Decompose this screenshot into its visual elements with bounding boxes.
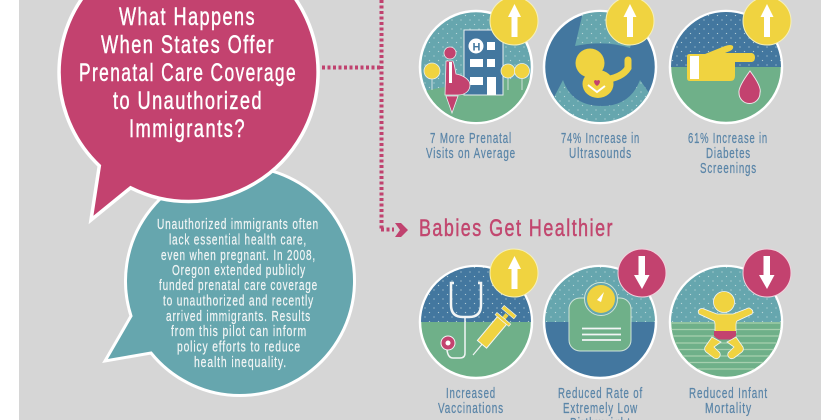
badge: up arrow bbox=[606, 0, 654, 45]
labels: bottom row: Mortality bbox=[705, 400, 752, 417]
labels: bottom row: Vaccinations bbox=[438, 400, 504, 417]
labels: bottom row: Reduced Rate of bbox=[558, 385, 643, 402]
labels: top row bbox=[426, 130, 768, 177]
body text bbox=[157, 217, 319, 371]
syringe bbox=[472, 305, 517, 356]
icon: infant mortality bbox=[665, 265, 787, 378]
body text: from this pilot can inform bbox=[171, 324, 307, 340]
labels: top row: Visits on Average bbox=[426, 145, 516, 162]
connector: dotted lines and arrow bbox=[322, 0, 408, 237]
heading: babies get healthier: Babies Get Healthier bbox=[419, 215, 614, 242]
icon: birthweight scale bbox=[540, 265, 662, 378]
body text: even when pregnant. In 2008, bbox=[161, 248, 316, 264]
body text: lack essential health care, bbox=[169, 232, 307, 248]
badge: down arrow bbox=[618, 249, 666, 297]
pregnant woman bbox=[444, 47, 470, 113]
title: When States Offer bbox=[101, 31, 275, 59]
labels: bottom row: Increased bbox=[446, 385, 496, 402]
pink speech bubble bbox=[59, 0, 318, 220]
labels: top row: 74% Increase in bbox=[561, 130, 640, 147]
labels: top row: Screenings bbox=[700, 160, 757, 177]
badge: up arrow bbox=[743, 0, 791, 45]
body text: Unauthorized immigrants often bbox=[157, 217, 319, 233]
fetus bbox=[576, 48, 628, 98]
trees bbox=[424, 63, 530, 90]
badge: up arrow bbox=[490, 249, 538, 297]
labels: top row: Diabetes bbox=[706, 145, 751, 162]
title: Prenatal Care Coverage bbox=[79, 59, 297, 87]
labels: bottom row: Reduced Infant bbox=[689, 385, 768, 402]
labels: top row: Ultrasounds bbox=[569, 145, 632, 162]
body text: funded prenatal care coverage bbox=[159, 278, 318, 294]
icon: ultrasound bbox=[544, 11, 656, 125]
title: What Happens bbox=[119, 3, 256, 31]
body text: Oregon extended publicly bbox=[172, 263, 306, 279]
body text: policy efforts to reduce bbox=[177, 340, 301, 356]
baby bbox=[698, 292, 753, 359]
body text: to unauthorized and recently bbox=[163, 294, 314, 310]
badge: down arrow bbox=[743, 249, 791, 297]
teal speech bubble bbox=[105, 166, 355, 395]
badge: up arrow bbox=[490, 0, 538, 45]
icon: diabetes screening bbox=[665, 10, 787, 123]
body text: health inequality. bbox=[194, 355, 287, 371]
icon: prenatal visits bbox=[418, 10, 534, 125]
labels: top row: 7 More Prenatal bbox=[430, 130, 512, 147]
body text: arrived immigrants. Results bbox=[166, 309, 311, 325]
icon: vaccinations bbox=[415, 265, 537, 378]
title: Immigrants? bbox=[129, 115, 246, 143]
hospital: H bbox=[472, 42, 480, 54]
stethoscope bbox=[447, 283, 481, 358]
title: to Unauthorized bbox=[113, 87, 263, 115]
pointing hand bbox=[687, 45, 755, 81]
labels: bottom row bbox=[438, 385, 768, 420]
blood drop bbox=[739, 71, 760, 104]
labels: bottom row: Extremely Low bbox=[563, 400, 638, 417]
title bbox=[79, 3, 297, 143]
labels: top row: 61% Increase in bbox=[688, 130, 768, 147]
